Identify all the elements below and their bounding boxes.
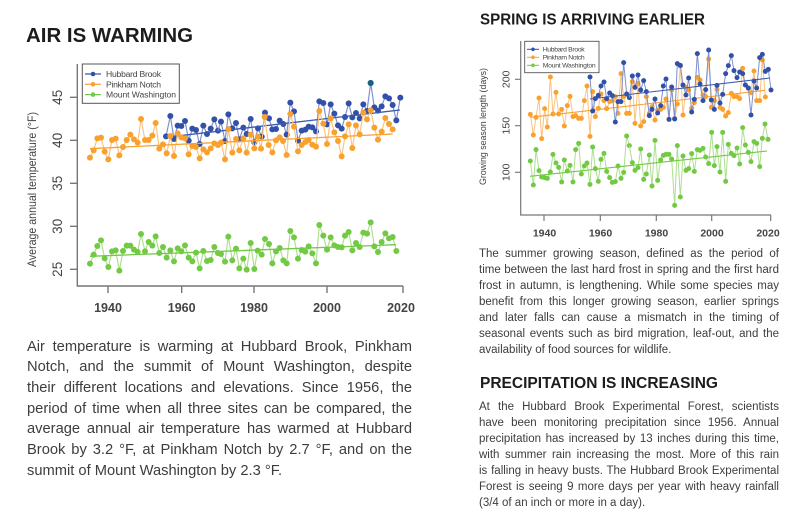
y axis tick labels: 25 xyxy=(50,262,65,277)
legend: growing season chart: Pinkham Notch xyxy=(543,55,585,62)
heading: precipitation is increasing: PRECIPITATION IS INCREASING xyxy=(480,375,718,392)
y axis tick labels: 35 xyxy=(50,176,65,191)
x axis tick labels: 1940 xyxy=(533,228,556,240)
y axis tick labels: 200 xyxy=(500,70,512,88)
text block: growing season: The summer growing season, defined as the period of xyxy=(479,248,779,260)
legend: growing season chart xyxy=(525,41,599,73)
text block: air temperature: average annual air temperature has warmed at Hubbard xyxy=(27,421,412,437)
text block: growing season: and later falls can cause a mismatch in the timing of xyxy=(479,312,779,324)
y axis tick labels xyxy=(500,70,512,181)
text block: air temperature: period of time when all three sites can be compared, the xyxy=(27,401,412,417)
text block: precipitation: is falling in heavy busts. The Hubbard Brook Experimental xyxy=(479,465,779,477)
text block: growing season: frost in autumn, is lengthening. While some species may xyxy=(479,280,779,292)
x axis tick labels: 1960 xyxy=(589,228,612,240)
text block: precipitation: have been monitoring precipitation since 1956. Annual xyxy=(479,417,779,429)
legend: temperature chart: Pinkham Notch xyxy=(106,79,161,89)
x axis tick labels: 1980 xyxy=(645,228,668,240)
y axis tick labels xyxy=(50,90,65,277)
x axis tick labels xyxy=(533,228,780,240)
series: Pinkham Notch temperature xyxy=(90,110,393,159)
series: Hubbard Brook temperature xyxy=(166,80,400,144)
x axis tick labels: 2000 xyxy=(700,228,724,240)
y axis title: Growing season length (days) xyxy=(478,68,489,185)
text block: growing season: seasonal events such as bird migration, leaf-out, and the xyxy=(479,328,779,340)
legend: growing season chart: Mount Washington xyxy=(543,63,596,70)
legend: temperature chart: Mount Washington xyxy=(106,90,176,100)
x axis tick labels: 1940 xyxy=(94,301,122,315)
y axis tick labels: 150 xyxy=(500,117,512,134)
text block: precipitation: with summer rain increasing the most. More of this rain xyxy=(479,449,779,461)
text block: precipitation: Forest is seeing 9 more days per year with heavy rainfall xyxy=(479,481,779,493)
legend: temperature chart xyxy=(82,64,179,103)
y axis tick labels: 100 xyxy=(500,163,512,181)
heading: spring is arriving earlier: SPRING IS ARRIVING EARLIER xyxy=(480,12,705,28)
x axis tick labels: 2020 xyxy=(387,301,415,315)
heading: air is warming: AIR IS WARMING xyxy=(26,25,193,47)
y axis tick labels: 45 xyxy=(50,90,65,105)
text block: air temperature: summit of Mount Washington by 2.3 °F. xyxy=(27,463,282,479)
text block: precipitation: precipitation has increased by 13 inches during this time, xyxy=(479,433,779,445)
text block: air temperature: Notch, and the summit of Mount Washington, despite xyxy=(27,359,412,375)
y axis title: Average annual temperature (°F) xyxy=(25,112,39,267)
text block: precipitation: (3/4 of an inch or more in a day). xyxy=(479,497,645,509)
x axis tick labels: 1980 xyxy=(240,301,268,315)
text block: growing season: benefit from this longer growing season, earlier springs xyxy=(479,296,779,308)
legend: temperature chart: Hubbard Brook xyxy=(106,69,162,79)
series: Pinkham Notch growing season xyxy=(530,59,765,139)
x axis tick labels: 2020 xyxy=(756,228,780,240)
y axis tick labels: 40 xyxy=(50,133,65,148)
x axis tick labels xyxy=(94,301,415,315)
series: Mount Washington temperature xyxy=(90,222,396,271)
text block: growing season: availability of food sources for wildlife. xyxy=(479,344,671,356)
text block: air temperature: their different locations and elevations. Since 1956, the xyxy=(27,380,412,396)
text block: growing season: time between the last hard frost in spring and the first hard xyxy=(479,264,779,276)
chart: growing season length xyxy=(478,41,780,240)
text block: air temperature: Brook by 3.2 °F, at Pinkham Notch by 2.7 °F, and on the xyxy=(27,442,412,458)
text block: precipitation xyxy=(479,401,779,509)
text block: growing season xyxy=(479,248,779,356)
legend: growing season chart: Hubbard Brook xyxy=(543,47,585,54)
chart: average annual temperature xyxy=(25,64,415,315)
series: Hubbard Brook growing season xyxy=(590,50,771,122)
text block: precipitation: At the Hubbard Brook Experimental Forest, scientists xyxy=(479,401,779,413)
text block: air temperature: Air temperature is warming at Hubbard Brook, Pinkham xyxy=(27,338,412,354)
x axis tick labels: 1960 xyxy=(168,301,196,315)
text block: air temperature xyxy=(27,338,412,479)
series: Mount Washington growing season xyxy=(530,124,768,205)
x axis tick labels: 2000 xyxy=(313,301,341,315)
y axis tick labels: 30 xyxy=(50,219,65,234)
